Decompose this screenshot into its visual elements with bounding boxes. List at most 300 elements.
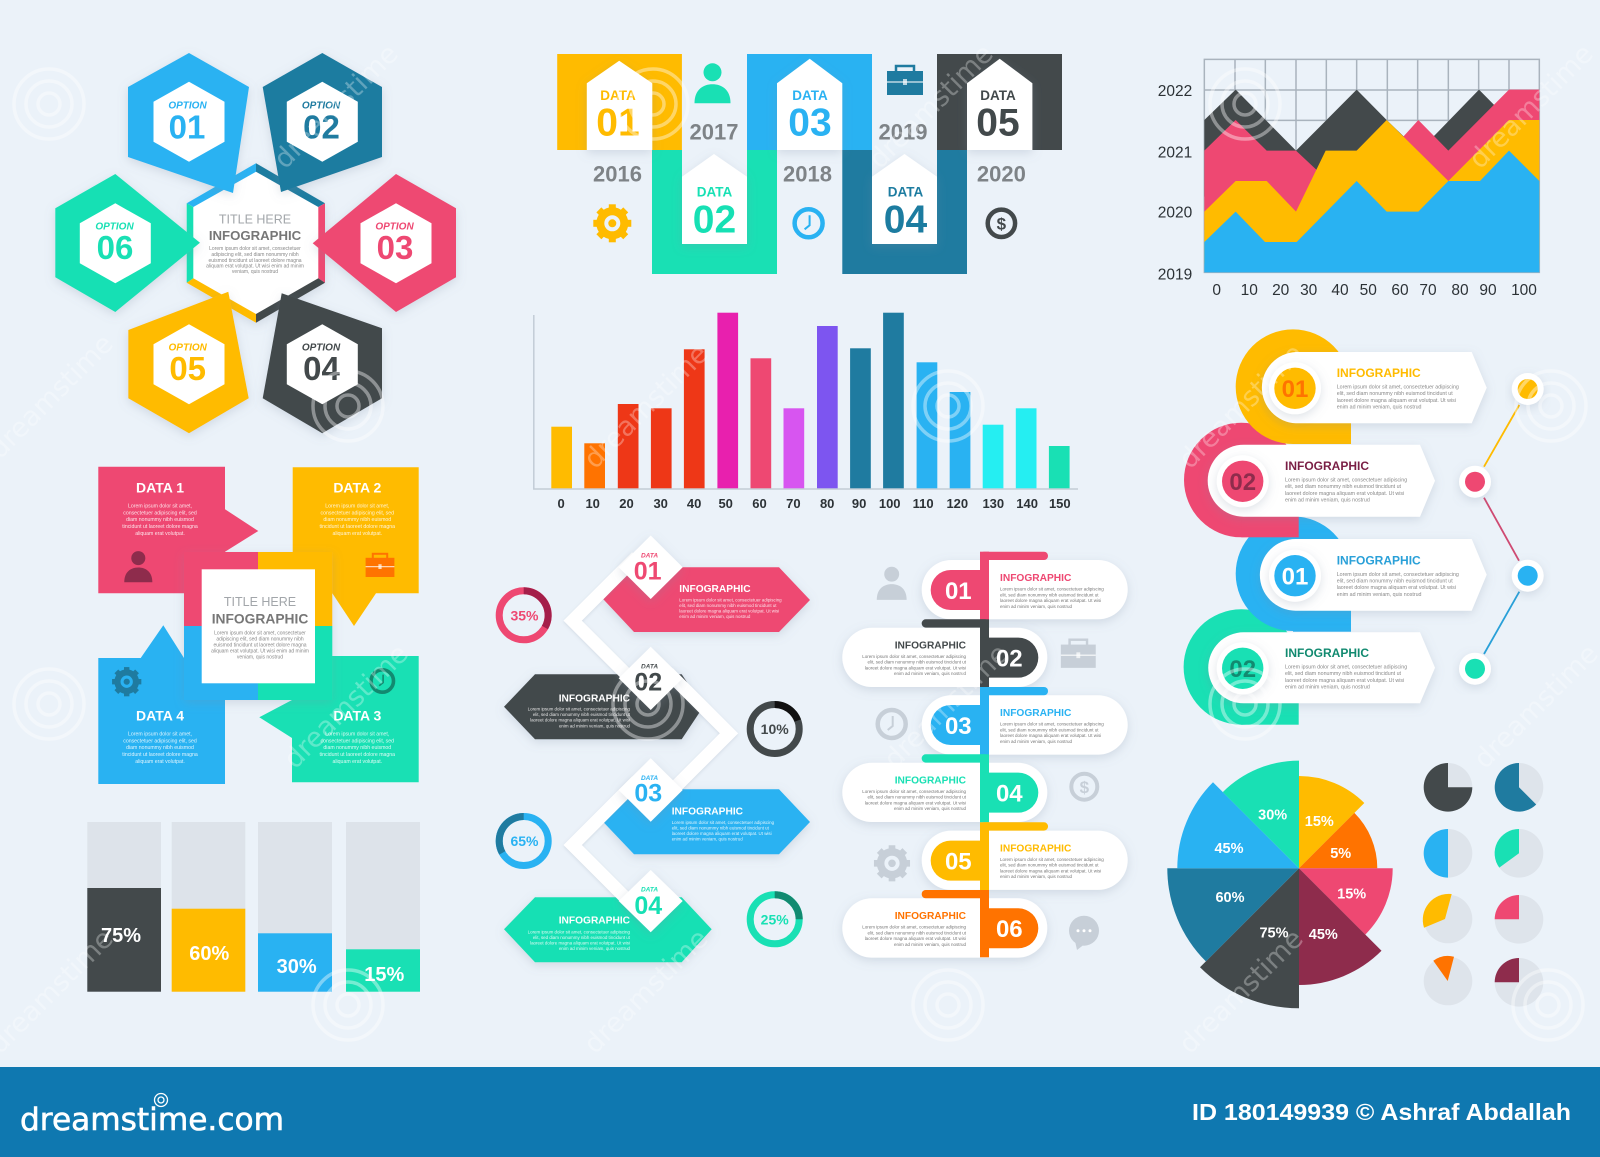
option 04: 04: [303, 350, 340, 387]
list item 1: [1262, 352, 1487, 423]
callout: data 3: Lorem ipsum dolor sit amet,: [325, 732, 389, 738]
footer bar: [0, 1067, 1600, 1157]
y axis labels: [1158, 83, 1193, 284]
bar labels: 0: [557, 496, 565, 511]
icon: gear: [593, 204, 631, 242]
option 01: OPTION: [168, 100, 207, 112]
ring gauge 10%: [750, 704, 799, 754]
central white title card: Lorem ipsum dolor sit amet, consectetuer: [214, 630, 306, 636]
entry 01: [922, 552, 1128, 620]
banner: 03 blue: [603, 789, 810, 854]
callout: data 4: Lorem ipsum dolor sit amet,: [128, 732, 192, 738]
entry 01: laoreet dolore magna aliquam erat volutpat. Ut wisi: [1000, 598, 1101, 603]
entry 01: elit, sed diam nonummy nibh euismod tincidunt ut: [1000, 592, 1099, 597]
list item 4: 02: [1229, 656, 1256, 683]
pie labels: [1214, 808, 1366, 943]
banner: 03 blue: INFOGRAPHIC: [672, 806, 744, 817]
step 04 blue U shape: [842, 150, 967, 274]
banner: 02 dark: Lorem ipsum dolor sit amet, consectetuer adipiscing: [528, 706, 631, 712]
banner: 01 red: [603, 567, 810, 632]
entry 05: [922, 822, 1128, 890]
diamond 01: 01: [634, 558, 662, 586]
callout: data 1: DATA 1: [136, 479, 184, 495]
x axis labels: 70: [1419, 282, 1437, 299]
diamond 03: [619, 758, 683, 822]
list item 4: elit, sed diam nonummy nibh euismod tincidunt ut: [1285, 671, 1402, 677]
panel: data timeline 2016-2020: [557, 54, 1062, 274]
bar labels: 120: [946, 496, 968, 511]
central hexagon title: veniam, quis nostrud: [232, 269, 278, 275]
banner: 04 teal: elit, sed diam nonummy nibh euismod tincidunt ut: [533, 935, 631, 940]
bar labels: 80: [820, 496, 834, 511]
icon: grey dollar: $: [1080, 778, 1090, 797]
x axis labels: 80: [1451, 282, 1469, 299]
banner: 03 blue: laoreet dolore magna aliquam erat volutpat. Ut wisi: [672, 831, 772, 836]
bar labels: 130: [982, 496, 1004, 511]
watermark overlay: dreamstime: [578, 923, 715, 1060]
entry 06: 06: [996, 916, 1023, 943]
connector lines: [1484, 405, 1519, 654]
y axis labels: 2021: [1158, 144, 1192, 162]
column 60%: [172, 822, 245, 992]
option 06: OPTION: [95, 221, 134, 232]
entry 03: laoreet dolore magna aliquam erat volutpat. Ut wisi: [1000, 733, 1101, 738]
list item 3: [1260, 539, 1487, 611]
option 03: OPTION: [375, 221, 414, 232]
callout: data 4: diam nonummy nibh euismod: [126, 745, 194, 751]
option 02: [263, 53, 382, 192]
column 75%: 75%: [101, 925, 141, 947]
list item 2: enim ad minim veniam, quis nostrud: [1285, 498, 1370, 504]
entry 03: INFOGRAPHIC: [1000, 708, 1072, 719]
tag 04: 04: [884, 198, 927, 241]
icon: grey clock: [878, 710, 906, 738]
entry 02: 02: [996, 645, 1023, 672]
callout: data 1: diam nonummy nibh euismod: [126, 517, 194, 523]
x axis labels: 90: [1479, 282, 1497, 299]
tag 03: 03: [788, 102, 832, 144]
step 05 dark block: [937, 54, 1062, 150]
tag 04: [872, 154, 937, 244]
tag 02: DATA: [697, 184, 732, 200]
column 60%: 60%: [189, 943, 230, 965]
tag 05: 05: [976, 102, 1020, 144]
banner: 01 red: enim ad minim veniam, quis nostrud: [679, 614, 751, 619]
watermark overlay: dreamstime: [878, 638, 1015, 775]
bar labels: 100: [879, 496, 901, 511]
pie labels: 60%: [1215, 890, 1245, 906]
diamond 03: 03: [634, 780, 662, 808]
list item 4: [1208, 632, 1435, 703]
banner: 01 red: laoreet dolore magna aliquam erat volutpat. Ut wisi: [679, 608, 779, 613]
entry 04: laoreet dolore magna aliquam erat volutpat. Ut wisi: [865, 800, 966, 805]
x axis labels: 30: [1300, 282, 1318, 299]
list item 4: INFOGRAPHIC: [1285, 646, 1369, 660]
icon: grey gear: [874, 845, 910, 881]
footer logo spiral: [154, 1094, 168, 1106]
list item 3: elit, sed diam nonummy nibh euismod tincidunt ut: [1337, 578, 1453, 584]
callout: data 3: DATA 3: [333, 707, 381, 723]
icon: person: [694, 63, 730, 103]
pie labels: 45%: [1309, 927, 1338, 943]
diamond 04: 04: [634, 892, 662, 920]
entry 04: enim ad minim veniam, quis nostrud: [894, 806, 966, 811]
node dots: [1459, 373, 1544, 685]
tag 01: [587, 61, 652, 150]
entry 04: 04: [996, 780, 1023, 807]
central hexagon title: Lorem ipsum dolor sit amet, consectetuer: [209, 246, 301, 252]
panel: vertical pill timeline: [842, 552, 1128, 958]
watermark overlay: dreamstime: [268, 38, 405, 175]
entry 06: INFOGRAPHIC: [895, 911, 967, 922]
panel: hexagon options diagram: [55, 53, 456, 433]
tag 02: [682, 154, 747, 244]
callout: data 2: aliquam erat volutpat.: [332, 531, 382, 537]
icon: grey chat bubble: [1069, 916, 1099, 950]
list item 2: 02: [1229, 469, 1256, 496]
banner: 04 teal: Lorem ipsum dolor sit amet, consectetuer adipiscing: [528, 930, 631, 934]
tag 04: DATA: [888, 184, 923, 200]
curve backing yellow: [1236, 329, 1351, 444]
callout: data 2: diam nonummy nibh euismod: [323, 517, 391, 523]
ring gauge 35%: [499, 591, 548, 640]
tag 02: 02: [693, 198, 736, 241]
watermark overlay: dreamstime: [1173, 338, 1310, 475]
entry 01: 01: [945, 578, 972, 605]
entry 06: laoreet dolore magna aliquam erat volutpat. Ut wisi: [865, 936, 966, 941]
diamond 01: DATA: [641, 552, 658, 560]
option 02: OPTION: [302, 100, 341, 112]
central hexagon title: aliquam erat volutpat. Ut wisi enim ad minim: [206, 264, 304, 270]
x axis labels: 20: [1272, 282, 1290, 299]
column 30%: [258, 822, 332, 992]
pie labels: 75%: [1259, 926, 1289, 942]
option 03: [313, 174, 456, 312]
entry 02: Lorem ipsum dolor sit amet, consectetuer adipiscing: [862, 654, 966, 659]
watermark overlay: dreamstime: [863, 38, 1000, 175]
banner: 04 teal: laoreet dolore magna aliquam erat volutpat. Ut wisi: [530, 940, 630, 945]
banner: 02 dark: elit, sed diam nonummy nibh euismod tincidunt ut: [533, 712, 631, 717]
option 01: [128, 53, 249, 193]
callout: data 3: diam nonummy nibh euismod: [323, 745, 391, 751]
step 03 blue block: [747, 54, 872, 150]
year labels: [593, 120, 1026, 186]
entry 05: Lorem ipsum dolor sit amet, consectetuer adipiscing: [1000, 857, 1104, 862]
callout: data 2: DATA 2: [333, 479, 381, 495]
year labels: 2016: [593, 161, 642, 186]
x axis labels: 0: [1212, 282, 1221, 299]
bar labels: 110: [913, 496, 934, 511]
pie labels: 5%: [1330, 846, 1351, 862]
central white title card: INFOGRAPHIC: [212, 611, 308, 626]
bars: [551, 313, 1070, 488]
list item 1: elit, sed diam nonummy nibh euismod tincidunt ut: [1337, 391, 1453, 397]
list item 1: enim ad minim veniam, quis nostrud: [1337, 405, 1422, 411]
entry 06: elit, sed diam nonummy nibh euismod tincidunt ut: [867, 930, 967, 935]
entry 06: [842, 890, 1047, 958]
entry 04: Lorem ipsum dolor sit amet, consectetuer adipiscing: [862, 789, 966, 794]
option 01: 01: [169, 108, 205, 146]
bar labels: 140: [1016, 496, 1038, 511]
bar labels: 60: [752, 496, 767, 511]
white zigzag line: [573, 557, 729, 916]
option 06: 06: [97, 229, 133, 266]
x axis labels: 50: [1360, 282, 1377, 299]
diamond 02: DATA: [641, 664, 658, 670]
central white title card: euismod tincidunt ut laoreet dolore magna: [213, 642, 307, 648]
banner: 03 blue: elit, sed diam nonummy nibh euismod tincidunt ut: [672, 825, 770, 830]
diamond 02: [619, 647, 683, 710]
entry 01: INFOGRAPHIC: [1000, 573, 1072, 584]
list item 3: enim ad minim veniam, quis nostrud: [1337, 592, 1422, 598]
list item 2: laoreet dolore magna aliquam erat volutpat. Ut wisi: [1285, 491, 1404, 497]
banner: 01 red: INFOGRAPHIC: [679, 584, 751, 595]
entry 05: INFOGRAPHIC: [1000, 843, 1072, 854]
entry 02: elit, sed diam nonummy nibh euismod tincidunt ut: [867, 660, 967, 665]
year labels: 2019: [879, 120, 927, 145]
entry 05: 05: [945, 848, 972, 875]
y axis labels: 2019: [1158, 266, 1192, 284]
pie labels: 30%: [1258, 808, 1287, 824]
chart plot: [1204, 59, 1539, 272]
banner: 01 red: Lorem ipsum dolor sit amet, consectetuer adipiscing: [679, 598, 782, 603]
callout: data 4: aliquam erat volutpat.: [135, 759, 185, 765]
bar labels: 150: [1049, 496, 1071, 511]
callout: data 4: DATA 4: [136, 707, 184, 723]
step 01 yellow block: [557, 54, 682, 150]
list item 1: Lorem ipsum dolor sit amet, consectetuer adipiscing: [1337, 384, 1459, 390]
icon: dollar: [988, 210, 1015, 237]
tag 05: DATA: [980, 88, 1016, 103]
area chart: [1158, 59, 1539, 299]
panel: four data callouts with central square: [98, 467, 419, 784]
bar labels: 40: [687, 496, 701, 511]
icon: grey dollar: [1071, 774, 1097, 800]
x axis labels: 100: [1511, 282, 1537, 299]
tag 03: DATA: [792, 88, 828, 103]
y axis labels: 2020: [1158, 204, 1193, 222]
entry 03: enim ad minim veniam, quis nostrud: [1000, 739, 1073, 744]
banner: 04 teal: [504, 897, 712, 962]
list item 2: Lorem ipsum dolor sit amet, consectetuer adipiscing: [1285, 478, 1407, 484]
central hexagon title: euismod tincidunt ut laoreet dolore magna: [208, 258, 302, 264]
x axis labels: 60: [1391, 282, 1409, 299]
banner: 01 red: elit, sed diam nonummy nibh euismod tincidunt ut: [679, 603, 777, 608]
entry 03: elit, sed diam nonummy nibh euismod tincidunt ut: [1000, 727, 1099, 732]
list item 2: [1208, 445, 1435, 517]
list item 3: INFOGRAPHIC: [1337, 553, 1421, 567]
diamond 04: DATA: [641, 887, 658, 894]
central white title card: TITLE HERE: [224, 595, 296, 609]
callout: data 2: Lorem ipsum dolor sit amet,: [325, 504, 389, 510]
year labels: 2018: [783, 161, 832, 186]
panel: percentage progress columns: [87, 822, 420, 992]
banner: 02 dark: [504, 674, 703, 739]
entry 02: enim ad minim veniam, quis nostrud: [894, 671, 966, 676]
entry 03: 03: [945, 713, 972, 740]
central hexagon title: adipiscing elit, sed diam nonummy nibh: [211, 252, 299, 258]
tag 05: [967, 59, 1032, 150]
bar labels: 50: [718, 496, 733, 511]
central white title card: [202, 569, 315, 683]
watermark overlay: dreamstime: [1463, 38, 1600, 175]
option 05: OPTION: [169, 342, 208, 353]
y axis labels: 2022: [1158, 83, 1192, 100]
year labels: 2017: [690, 120, 738, 145]
option 06: [55, 174, 200, 312]
callout: data 4: [98, 625, 225, 784]
diamond 04: [619, 870, 683, 932]
entry 01: enim ad minim veniam, quis nostrud: [1000, 604, 1073, 609]
list item 4: enim ad minim veniam, quis nostrud: [1285, 685, 1370, 691]
list item 4: laoreet dolore magna aliquam erat volutpat. Ut wisi: [1285, 678, 1404, 684]
bar labels: 70: [786, 496, 801, 511]
bar labels: 30: [653, 496, 668, 511]
callout: data 2: consectetuer adipiscing elit, sed: [321, 510, 394, 516]
central hexagon title: TITLE HERE: [219, 212, 291, 226]
tag 03: [777, 59, 842, 150]
entry 06: Lorem ipsum dolor sit amet, consectetuer adipiscing: [862, 925, 966, 930]
banner: 02 dark: laoreet dolore magna aliquam erat volutpat. Ut wisi: [530, 718, 630, 722]
entry 05: elit, sed diam nonummy nibh euismod tincidunt ut: [1000, 863, 1099, 868]
column 30%: 30%: [277, 956, 317, 978]
watermark overlay: dreamstime: [578, 338, 715, 475]
small pie set: [1423, 763, 1543, 1007]
banner: 04 teal: INFOGRAPHIC: [559, 916, 631, 927]
tag 01: 01: [596, 102, 640, 144]
entry 05: enim ad minim veniam, quis nostrud: [1000, 874, 1073, 879]
option 02: 02: [303, 108, 340, 146]
entry 03: Lorem ipsum dolor sit amet, consectetuer adipiscing: [1000, 722, 1104, 727]
callout: data 4: tincidunt ut laoreet dolore magna: [122, 752, 198, 758]
option 03: 03: [377, 229, 413, 266]
entry 04: [842, 754, 1047, 822]
icon: grey briefcase: [1061, 640, 1096, 668]
footer logo text: dreamstime.com: [20, 1102, 284, 1138]
entry 02: laoreet dolore magna aliquam erat volutpat. Ut wisi: [865, 665, 966, 670]
banner: 04 teal: enim ad minim veniam, quis nostrud: [559, 946, 631, 951]
option 04: [263, 293, 382, 433]
option 05: 05: [169, 350, 206, 387]
entry 06: enim ad minim veniam, quis nostrud: [894, 942, 966, 947]
bar labels: 20: [619, 496, 634, 511]
entry 02: [842, 619, 1047, 687]
option 05: [128, 292, 249, 433]
list item 3: 01: [1282, 563, 1308, 590]
entry 04: INFOGRAPHIC: [895, 775, 967, 786]
column 15%: [346, 822, 420, 992]
step 02 teal U shape: [652, 150, 777, 274]
curve backing red: [1184, 423, 1299, 537]
callout: data 4: consectetuer adipiscing elit, sed: [123, 738, 197, 744]
callout: data 2: [293, 467, 419, 626]
entry 03: [922, 687, 1128, 755]
list item 4: Lorem ipsum dolor sit amet, consectetuer adipiscing: [1285, 664, 1407, 670]
list item 3: laoreet dolore magna aliquam erat volutpat. Ut wisi: [1337, 585, 1456, 591]
bar chart: [534, 313, 1078, 511]
bar labels: 90: [852, 496, 866, 511]
ring gauge 65%: [499, 816, 548, 866]
x axis labels: [1212, 282, 1537, 299]
diamond 01: [619, 536, 683, 599]
entry 05: laoreet dolore magna aliquam erat volutpat. Ut wisi: [1000, 868, 1101, 873]
ring gauge 25%: 25%: [761, 911, 789, 927]
icon: dollar: $: [997, 214, 1007, 234]
pie labels: 15%: [1337, 886, 1366, 902]
ring gauge 25%: [750, 895, 799, 944]
central white title card: veniam, quis nostrud: [237, 654, 283, 660]
entry 04: elit, sed diam nonummy nibh euismod tincidunt ut: [867, 795, 967, 800]
central white title card: adipiscing elit, sed diam nonummy nibh: [216, 636, 304, 642]
ring gauge 65%: 65%: [510, 833, 539, 849]
tag 01: DATA: [600, 88, 636, 103]
curve backing teal: [1184, 609, 1299, 725]
callout: data 1: consectetuer adipiscing elit, sed: [123, 510, 197, 516]
central white title card: aliquam erat volutpat. Ut wisi enim ad minim: [211, 648, 309, 654]
column 15%: 15%: [364, 964, 405, 986]
callout: data 1: aliquam erat volutpat.: [135, 531, 185, 537]
watermark overlay: dreamstime: [1173, 923, 1310, 1060]
callout: data 3: aliquam erat volutpat.: [332, 759, 382, 765]
central hexagon title: INFOGRAPHIC: [209, 228, 302, 243]
curve backing blue: [1236, 516, 1351, 632]
list item 3: Lorem ipsum dolor sit amet, consectetuer adipiscing: [1337, 572, 1459, 578]
entry 02: INFOGRAPHIC: [895, 640, 967, 651]
banner: 02 dark: INFOGRAPHIC: [559, 693, 631, 704]
column 75%: [87, 822, 161, 992]
watermark overlay: dreamstime: [278, 638, 415, 775]
bar labels: 10: [585, 496, 600, 511]
callout: data 1: tincidunt ut laoreet dolore magna: [122, 524, 198, 530]
x axis labels: 40: [1331, 282, 1349, 299]
icon: grey person: [877, 567, 907, 600]
ring gauge 35%: 35%: [510, 607, 539, 623]
x axis labels: 10: [1241, 282, 1258, 299]
diamond 02: 02: [634, 668, 662, 696]
banner: 03 blue: Lorem ipsum dolor sit amet, consectetuer adipiscing: [672, 820, 775, 825]
central coloured square: [184, 552, 332, 700]
icon: briefcase: [887, 66, 923, 95]
diamond 03: DATA: [641, 775, 658, 782]
pie labels: 45%: [1214, 841, 1244, 857]
panel: exploded radial pie chart: [1167, 761, 1393, 1008]
callout: data 1: Lorem ipsum dolor sit amet,: [128, 504, 192, 510]
list item 2: INFOGRAPHIC: [1285, 459, 1369, 473]
callout: data 3: tincidunt ut laoreet dolore magna: [320, 752, 395, 758]
banner: 03 blue: enim ad minim veniam, quis nostrud: [672, 836, 743, 841]
callout: data 2: tincidunt ut laoreet dolore magna: [320, 524, 395, 530]
callout: data 3: consectetuer adipiscing elit, sed: [321, 738, 394, 744]
list item 1: laoreet dolore magna aliquam erat volutpat. Ut wisi: [1337, 398, 1456, 404]
panel: stacked curved list with connected dots: [1184, 329, 1544, 725]
callout: data 1: [98, 467, 258, 593]
callout: data 3: [259, 656, 419, 782]
banner: 02 dark: enim ad minim veniam, quis nostrud: [559, 724, 631, 728]
year labels: 2020: [977, 161, 1026, 186]
list item 2: elit, sed diam nonummy nibh euismod tincidunt ut: [1285, 484, 1402, 490]
bar labels: [557, 496, 1071, 511]
list item 1: 01: [1282, 376, 1308, 403]
icon: clock: [795, 209, 823, 237]
panel: zigzag data ribbon: [499, 536, 810, 962]
list item 1: INFOGRAPHIC: [1337, 366, 1421, 380]
central hexagon title: [187, 163, 325, 323]
pie labels: 15%: [1305, 814, 1334, 830]
footer credit text: ID 180149939 © Ashraf Abdallah: [1192, 1099, 1571, 1125]
entry 01: Lorem ipsum dolor sit amet, consectetuer adipiscing: [1000, 587, 1104, 592]
ring gauge 10%: 10%: [761, 721, 789, 737]
option 04: OPTION: [302, 342, 341, 353]
